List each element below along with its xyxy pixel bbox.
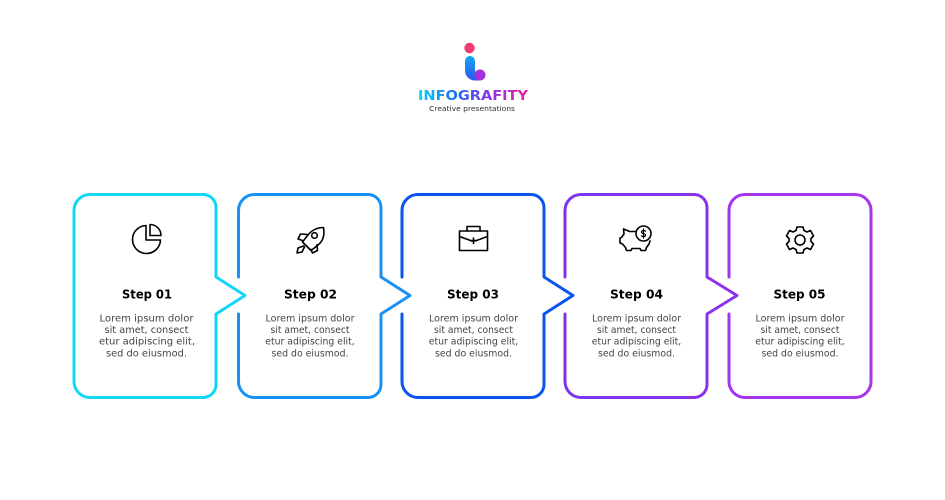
icon: gear <box>786 227 814 253</box>
logo <box>418 43 528 113</box>
text block: Lorem ipsum dolor <box>592 314 681 324</box>
heading: Step 03 <box>447 286 499 302</box>
logo mark <box>464 43 486 80</box>
text block: etur adipiscing elit, <box>429 336 518 348</box>
box outline with arrow <box>238 194 410 398</box>
text block <box>99 314 195 360</box>
brand name: INFOGRAFITY <box>418 88 528 104</box>
heading: Step 01 <box>122 286 172 302</box>
text block <box>265 314 355 360</box>
tagline: Creative presentations <box>429 105 515 113</box>
text block: etur adipiscing elit, <box>592 336 681 348</box>
text block: Lorem ipsum dolor <box>756 314 845 324</box>
text block: Lorem ipsum dolor <box>266 314 355 324</box>
text block: sit amet, consect <box>104 325 189 336</box>
box outline with arrow <box>402 194 573 398</box>
text block: etur adipiscing elit, <box>265 336 355 348</box>
text block <box>592 314 681 360</box>
text block: sed do eiusmod. <box>106 348 187 360</box>
heading: Step 04 <box>610 286 663 302</box>
text block: etur adipiscing elit, <box>99 336 195 348</box>
box outline <box>729 194 871 398</box>
panel: step 01 <box>74 194 245 398</box>
panel: step 04 <box>565 194 737 398</box>
text block: sit amet, consect <box>270 325 350 336</box>
text block: sed do eiusmod. <box>272 348 348 360</box>
panel: step 05 <box>729 194 871 398</box>
text block: sit amet, consect <box>597 325 676 336</box>
icon: briefcase <box>460 226 488 250</box>
heading: Step 05 <box>774 286 826 302</box>
text block <box>429 314 518 360</box>
text block: sed do eiusmod. <box>762 348 838 360</box>
text block: etur adipiscing elit, <box>755 336 845 348</box>
icon: piggy bank with coin <box>620 226 651 250</box>
panel: step 02 <box>238 194 410 398</box>
text block: sit amet, consect <box>434 325 513 336</box>
icon: pie chart <box>133 224 161 253</box>
text block: sed do eiusmod. <box>435 348 512 360</box>
box outline with arrow <box>565 194 737 398</box>
panel: step 03 <box>402 194 573 398</box>
text block: Lorem ipsum dolor <box>429 314 518 324</box>
box outline with arrow <box>74 194 245 398</box>
heading: Step 02 <box>284 286 337 302</box>
text block: sit amet, consect <box>760 325 840 336</box>
text block <box>755 314 845 360</box>
icon: rocket <box>297 228 324 253</box>
text block: Lorem ipsum dolor <box>100 314 194 324</box>
text block: sed do eiusmod. <box>598 348 675 360</box>
